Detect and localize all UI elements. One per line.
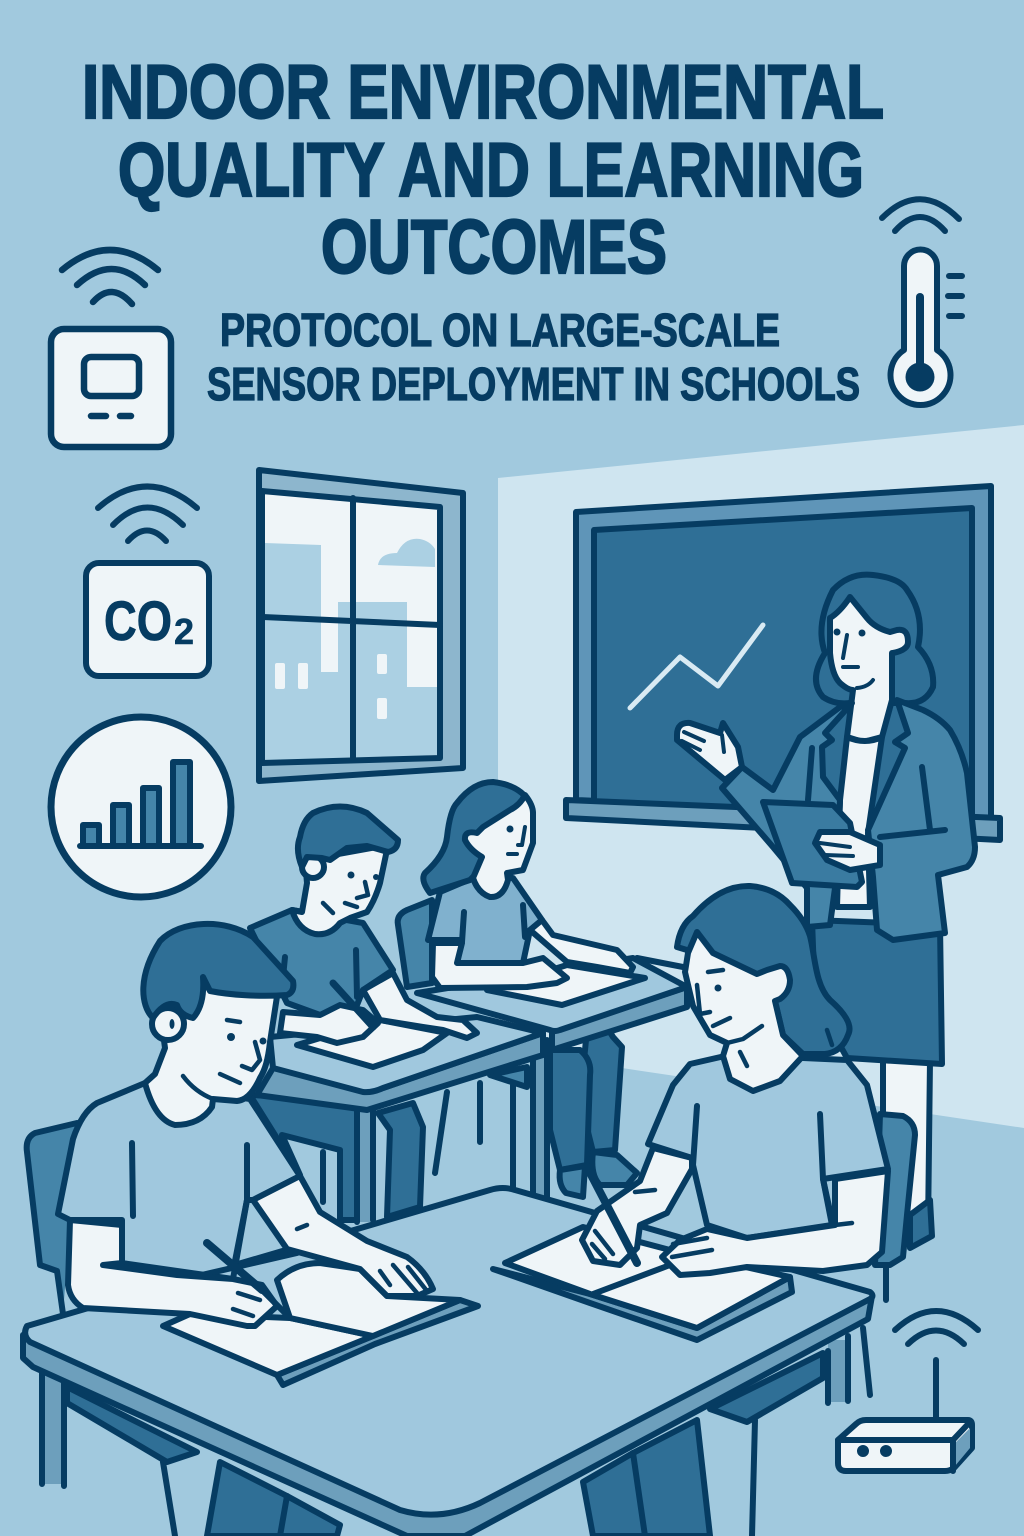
- desk: [552, 987, 687, 1050]
- subtitle: SENSOR DEPLOYMENT IN SCHOOLS: [207, 358, 860, 410]
- chart line on board: [630, 625, 763, 708]
- shirt: [648, 1056, 888, 1238]
- front table: [23, 1188, 872, 1536]
- jacket: [722, 703, 852, 927]
- hair: [677, 886, 850, 1054]
- subtitle: [207, 304, 860, 410]
- dark under desk: [250, 1095, 367, 1220]
- front right student: [493, 886, 888, 1340]
- city view: [263, 543, 437, 763]
- shirt: [58, 1083, 300, 1279]
- head: [465, 795, 533, 897]
- tablet: [763, 802, 862, 887]
- book: [297, 1020, 447, 1067]
- hair: [423, 782, 533, 893]
- shirt: [250, 910, 393, 1015]
- teacher: [677, 575, 975, 1248]
- front table legs: [42, 1328, 870, 1536]
- back left student and desk: [250, 806, 543, 1222]
- title: [82, 50, 884, 290]
- face and neck: [685, 932, 803, 1091]
- title: QUALITY AND LEARNING: [118, 128, 864, 213]
- window: [259, 470, 463, 781]
- icon: thermometer with wifi: [882, 199, 962, 405]
- icon: router with wifi: [838, 1311, 978, 1471]
- title: OUTCOMES: [321, 205, 667, 290]
- neck and face: [830, 597, 908, 742]
- chalkboard: [566, 486, 1000, 840]
- right arm: [253, 1176, 433, 1296]
- book: [487, 965, 645, 1005]
- arms: [363, 973, 477, 1038]
- chair seat and legs: [490, 1067, 527, 1087]
- trousers: [580, 1000, 622, 1152]
- desk: [257, 1033, 543, 1110]
- holding hand: [815, 832, 880, 870]
- legs: [883, 1060, 930, 1230]
- arms: [530, 920, 633, 973]
- raised hand: [677, 723, 742, 780]
- right arm and hand: [662, 1171, 888, 1275]
- icon: CO2 sensor with wifi: CO: [104, 589, 172, 652]
- chair: [398, 900, 432, 987]
- left arm and hand: [582, 1148, 692, 1265]
- pen: [207, 1243, 262, 1290]
- shirt: [428, 878, 542, 963]
- hair: [816, 575, 933, 703]
- shoes: [592, 1152, 637, 1185]
- head: [292, 845, 388, 934]
- hair: [143, 924, 293, 1018]
- pen: [587, 1167, 637, 1263]
- subtitle: PROTOCOL ON LARGE-SCALE: [220, 304, 780, 356]
- front right chair: [875, 1114, 915, 1300]
- icon: bar chart circle: [51, 717, 231, 897]
- hair: [298, 806, 398, 867]
- icon: CO2 sensor with wifi: [86, 486, 209, 676]
- ear: [152, 1008, 184, 1040]
- face: [145, 985, 278, 1125]
- book: [493, 1227, 792, 1340]
- back right student and desk: [398, 782, 687, 1200]
- icon: CO2 sensor with wifi: 2: [174, 611, 194, 652]
- left arm: [68, 1220, 277, 1326]
- front left chair: [27, 1123, 77, 1314]
- book: [163, 1263, 478, 1385]
- front left student: [58, 924, 478, 1385]
- skirt: [812, 920, 942, 1064]
- icon: wall sensor with wifi: [51, 250, 171, 447]
- blouse: [837, 737, 882, 907]
